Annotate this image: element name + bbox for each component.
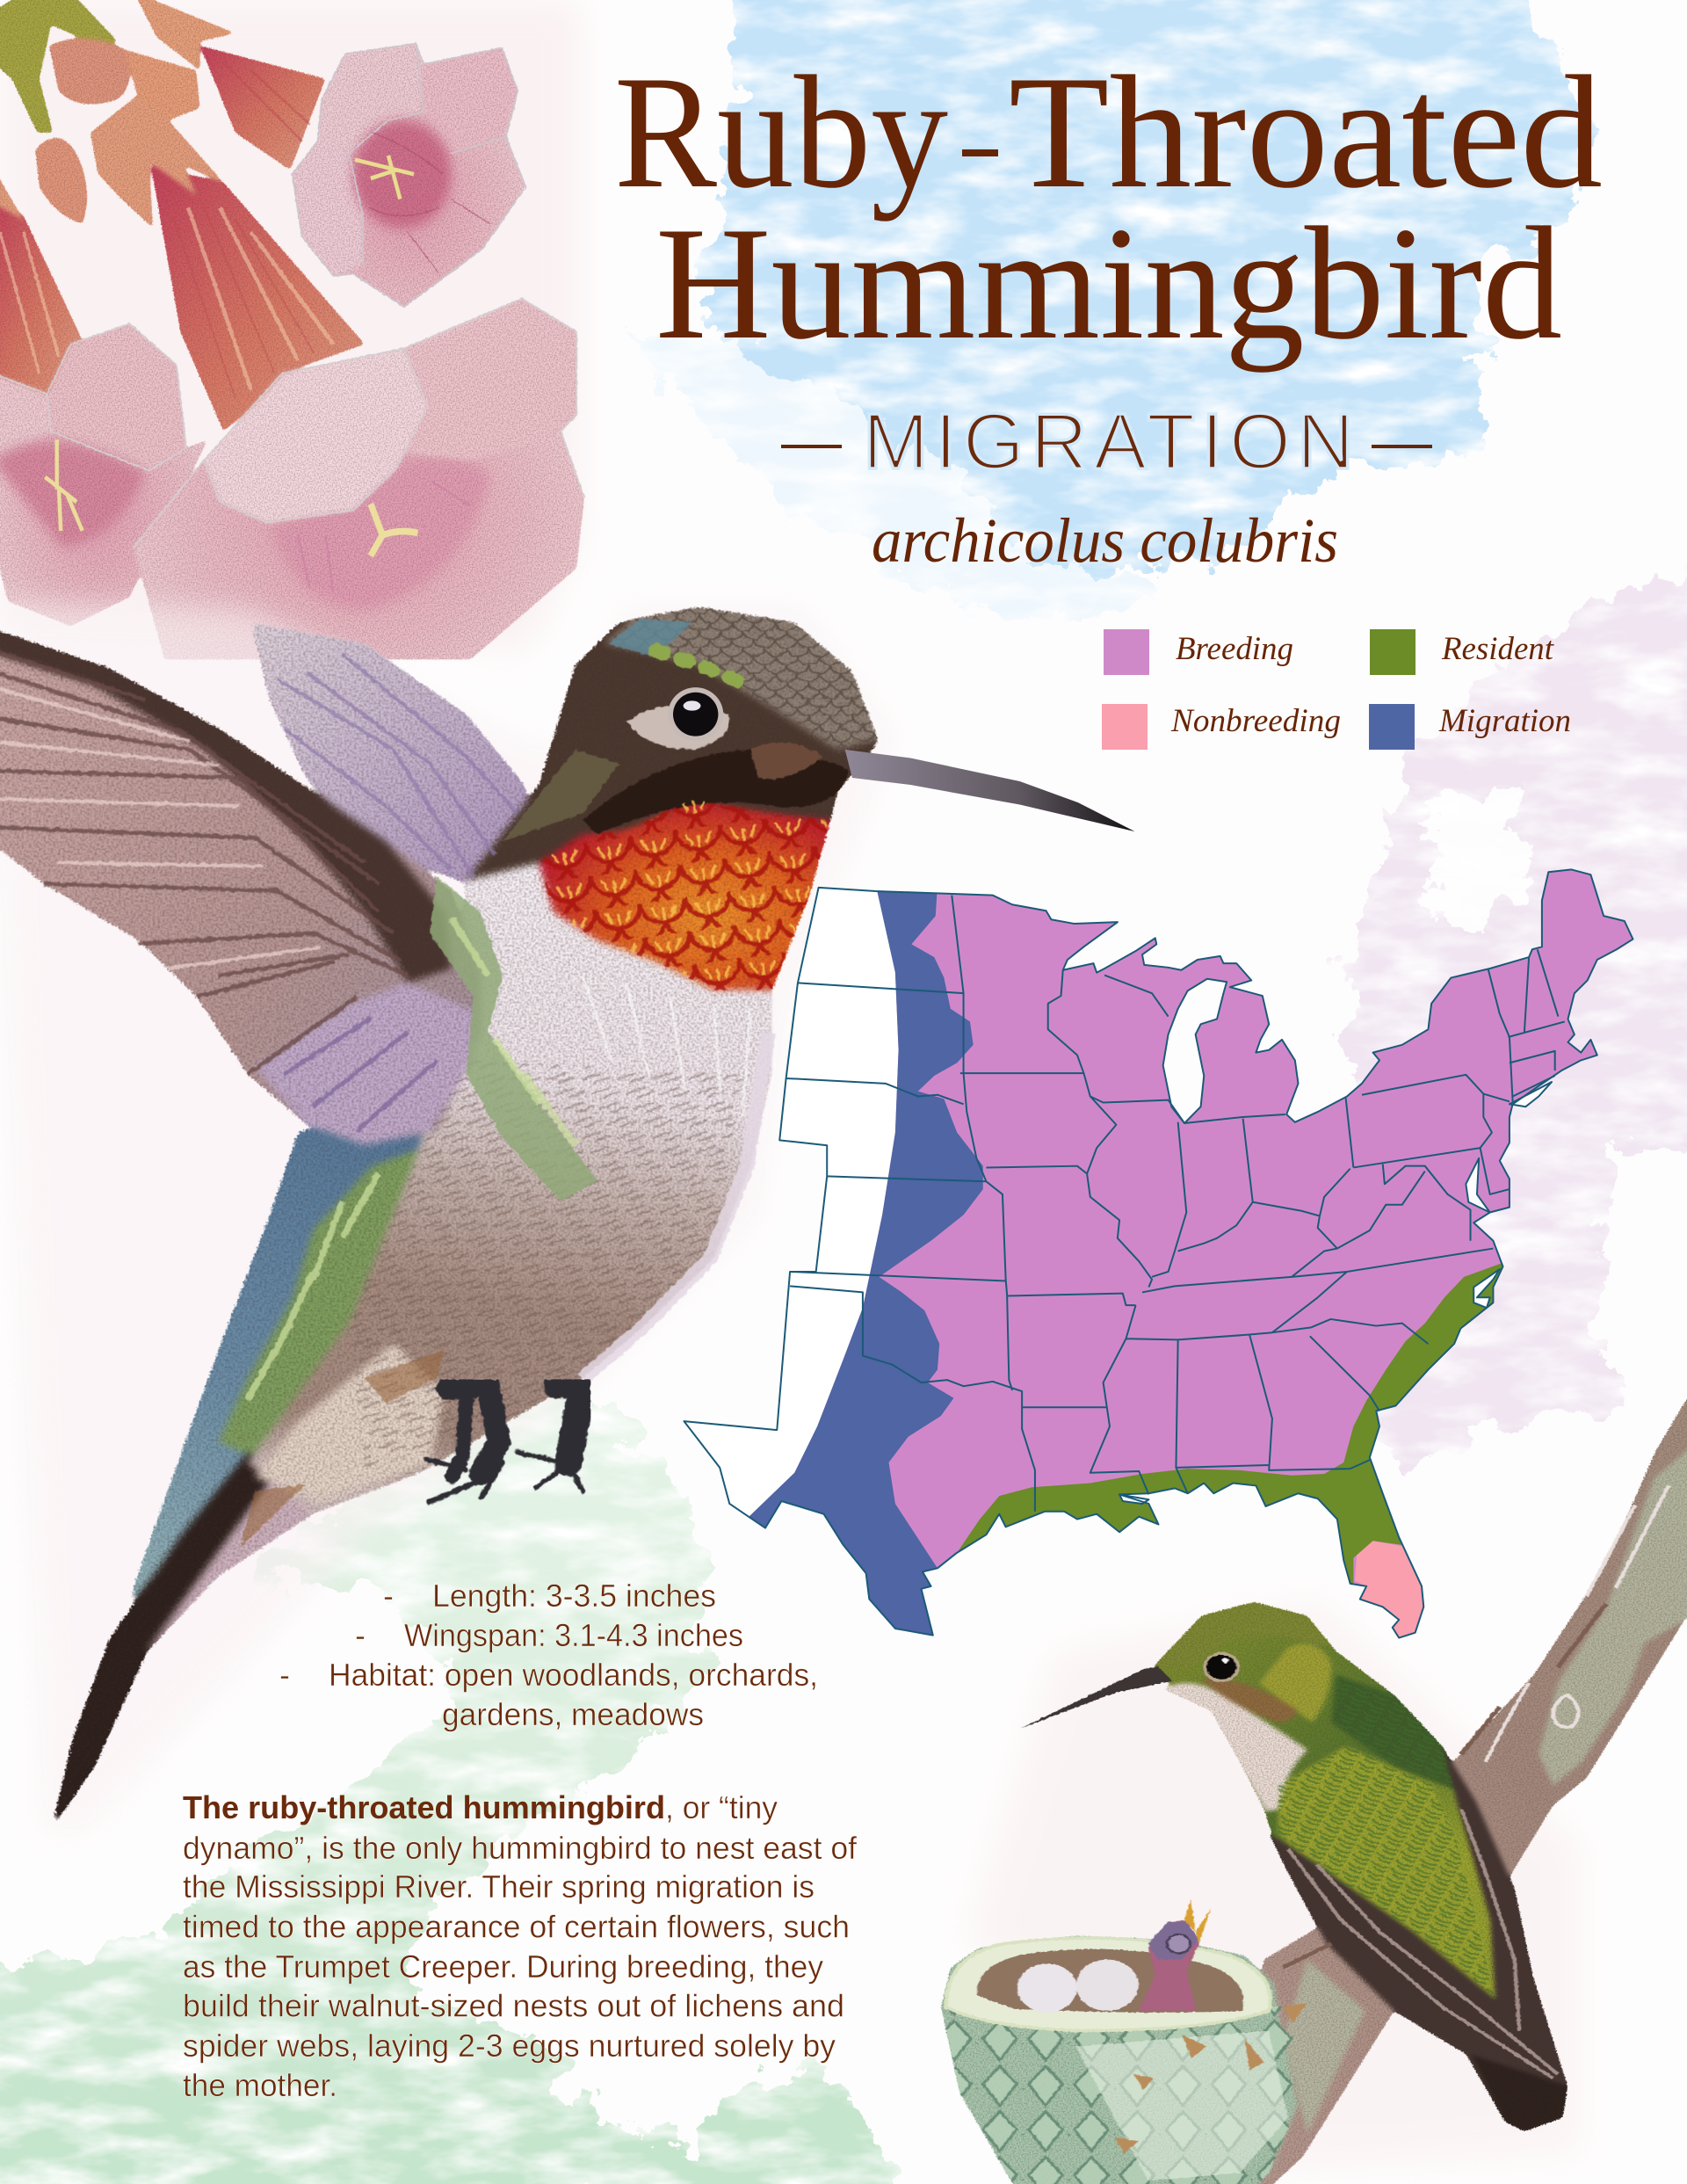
facts list: - bbox=[279, 1657, 290, 1693]
legend: migration bbox=[1369, 703, 1571, 750]
body fur bbox=[350, 1060, 743, 1470]
branch dark grain bbox=[1283, 1604, 1606, 1968]
description paragraph bbox=[183, 1789, 858, 2103]
female tail tip bbox=[1471, 2055, 1568, 2131]
wing feather lines bbox=[0, 650, 408, 1075]
flower: upper right bloom bbox=[293, 44, 525, 307]
green crown band bbox=[655, 650, 750, 686]
far wing bbox=[251, 622, 528, 884]
description paragraph: timed to the appearance of certain flowers, such bbox=[183, 1909, 850, 1944]
female eye bbox=[1203, 1652, 1240, 1682]
green flank bbox=[430, 877, 597, 1201]
legend: migration: Migration bbox=[1438, 703, 1571, 739]
lilac coverts bbox=[255, 983, 474, 1145]
facts list: Wingspan: 3.1-4.3 inches bbox=[404, 1617, 743, 1653]
lichen accents bbox=[1114, 2003, 1307, 2153]
legend: nonbreeding: Nonbreeding bbox=[1170, 703, 1341, 739]
egg one bbox=[1017, 1963, 1077, 2013]
painted bird masses bbox=[0, 607, 878, 1830]
description paragraph: dynamo”, is the only hummingbird to nest east of bbox=[183, 1830, 858, 1866]
illustration: adult male hummingbird bbox=[0, 601, 1135, 1830]
description paragraph: build their walnut-sized nests out of lichens and bbox=[183, 1988, 844, 2023]
halo around bird bbox=[0, 601, 896, 1830]
pale flank edge bbox=[583, 1032, 769, 1378]
title: Ruby bbox=[614, 42, 948, 221]
legend: breeding bbox=[1104, 629, 1293, 675]
female throat bbox=[1162, 1683, 1307, 1811]
state boundaries bbox=[786, 896, 1565, 1512]
watercolor wash: blue behind title bbox=[633, 0, 1590, 624]
description paragraph: the mother. bbox=[183, 2067, 337, 2103]
dark mask bbox=[583, 750, 849, 834]
description paragraph: as the Trumpet Creeper. During breeding, they bbox=[183, 1948, 823, 1984]
facts list bbox=[279, 1578, 818, 1732]
crown scales bbox=[605, 607, 878, 750]
watercolor wash: lilac right side bbox=[1344, 554, 1687, 1477]
chick bbox=[1139, 1899, 1211, 2011]
brown lore bbox=[750, 742, 823, 780]
tail under-plumage bbox=[139, 1427, 437, 1661]
legend: resident bbox=[1370, 629, 1555, 675]
description paragraph: The ruby-throated hummingbird bbox=[183, 1789, 665, 1825]
nest pale lichen bbox=[1076, 2031, 1288, 2180]
legend: breeding: Breeding bbox=[1176, 631, 1293, 667]
flower base painting bbox=[0, 0, 584, 659]
branch lichen bbox=[1283, 1430, 1687, 2133]
body bbox=[248, 862, 772, 1513]
chest strokes bbox=[583, 976, 750, 1117]
female bill bbox=[1020, 1666, 1172, 1729]
illustration: trumpet creeper flowers bbox=[0, 0, 584, 659]
nest rim bbox=[945, 1938, 1271, 2031]
female bird body bbox=[1153, 1602, 1568, 2131]
near wing bbox=[0, 626, 481, 1145]
map colour regions bbox=[749, 870, 1633, 1636]
green flank highlights bbox=[248, 919, 576, 1399]
yellow green flank bbox=[1278, 1746, 1495, 1999]
feather and scale details bbox=[0, 607, 878, 1548]
subtitle: migration: MIGRATION bbox=[863, 398, 1354, 486]
belly rust bbox=[241, 1350, 445, 1548]
title: Throated bbox=[1009, 42, 1603, 221]
crown bbox=[605, 607, 878, 750]
eye bbox=[668, 687, 723, 741]
coastal inlets and lake michigan bbox=[1119, 979, 1552, 1504]
fine details bbox=[1020, 1485, 1669, 2078]
flower: large lower bloom bbox=[134, 299, 584, 659]
female back feather pattern bbox=[1331, 1675, 1454, 1789]
dark wing band bbox=[0, 626, 452, 983]
female cheek bbox=[1201, 1679, 1298, 1723]
facts list: - bbox=[355, 1617, 366, 1653]
covert lines bbox=[284, 1018, 437, 1131]
teal forehead bbox=[608, 619, 692, 657]
watercolor wash: green lower left bbox=[0, 1380, 914, 2184]
title: Hummingbird bbox=[655, 193, 1562, 373]
range map of the eastern United States bbox=[683, 868, 1634, 1638]
bill bbox=[845, 750, 1135, 831]
head yellow bbox=[1259, 1643, 1331, 1723]
facts list: Habitat: open woodlands, orchards, bbox=[329, 1657, 818, 1693]
female wing and tail bbox=[1269, 1746, 1568, 2131]
far wing lines bbox=[277, 654, 518, 877]
pale eye patch bbox=[626, 705, 729, 750]
map outline bbox=[684, 869, 1633, 1638]
title bbox=[614, 42, 1603, 373]
flower: stamens bbox=[45, 156, 417, 555]
dark green back bbox=[1331, 1675, 1454, 1789]
nest bbox=[941, 1899, 1307, 2184]
egg two bbox=[1076, 1960, 1139, 2011]
wing highlights bbox=[0, 690, 321, 969]
branch bbox=[1240, 1398, 1687, 2184]
head bbox=[467, 607, 878, 881]
facts list: gardens, meadows bbox=[442, 1696, 704, 1732]
female crown bbox=[1153, 1602, 1331, 1671]
neck sheen bbox=[503, 750, 619, 841]
feet bbox=[426, 1385, 583, 1502]
tail feathers bbox=[51, 1452, 280, 1830]
scientific name: archicolus colubris bbox=[872, 505, 1338, 576]
facts list: Length: 3-3.5 inches bbox=[432, 1578, 716, 1614]
nest cup bbox=[977, 1949, 1243, 2013]
calyxes bbox=[0, 0, 235, 229]
flower: lower left bloom bbox=[0, 323, 208, 627]
branch grain bbox=[1486, 1485, 1669, 1762]
legend: nonbreeding bbox=[1102, 703, 1341, 750]
female flank feather pattern bbox=[1278, 1746, 1495, 1999]
back: blue and green bbox=[127, 1117, 474, 1604]
flower linework bbox=[0, 44, 584, 593]
nest body bbox=[941, 1936, 1298, 2184]
description paragraph: spider webs, laying 2-3 eggs nurtured solely by bbox=[183, 2028, 836, 2064]
nest scales bbox=[941, 2007, 1298, 2184]
gorget base bbox=[539, 799, 830, 990]
description paragraph: , or “tiny bbox=[665, 1789, 778, 1825]
map legend bbox=[1102, 629, 1571, 750]
ruby gorget scales bbox=[539, 799, 830, 990]
painted masses: branch and bird bbox=[941, 1398, 1687, 2184]
description paragraph: the Mississippi River. Their spring migration is bbox=[183, 1868, 815, 1905]
facts list: - bbox=[383, 1578, 394, 1614]
legend: resident: Resident bbox=[1441, 631, 1555, 667]
female wing feather lines bbox=[1288, 1810, 1558, 2078]
stems and buds bbox=[0, 0, 130, 224]
cream belly patch bbox=[255, 1343, 445, 1502]
trumpet tubes bbox=[0, 46, 365, 432]
illustration: female hummingbird with nest on branch bbox=[941, 1398, 1687, 2184]
